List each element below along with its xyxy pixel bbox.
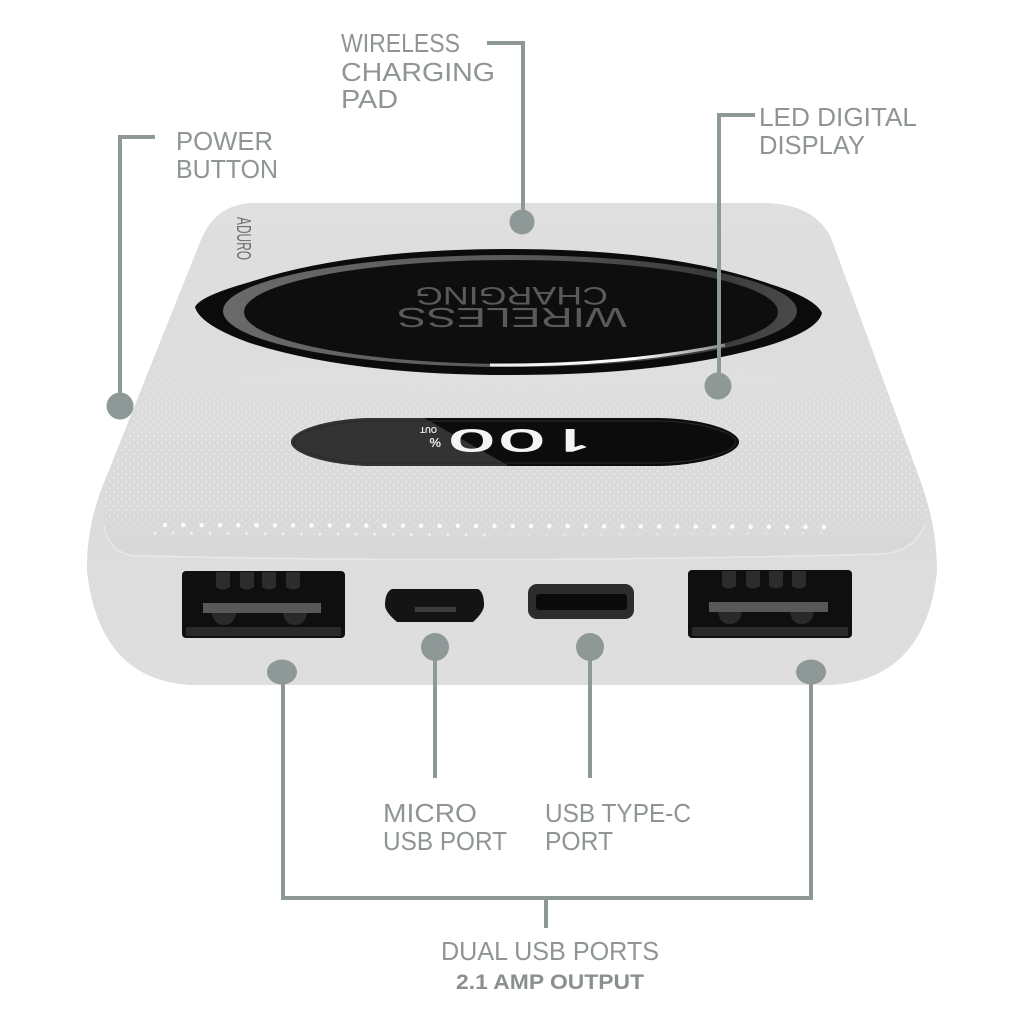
callout: LED digital display: DISPLAY [759, 130, 865, 160]
pad highlight [490, 345, 725, 365]
callout: USB type-C port [545, 633, 691, 856]
pad lettering: CHARGING [415, 281, 608, 309]
callout: wireless charging pad: CHARGING [341, 57, 495, 87]
power bank device [87, 203, 940, 685]
pad lettering [397, 281, 627, 333]
front edge dots [155, 525, 832, 535]
micro USB port [385, 589, 484, 622]
wireless charging pad [195, 249, 822, 375]
battery reading: % [429, 435, 441, 450]
callout: wireless charging pad: WIRELESS [341, 28, 460, 58]
callout: power button: POWER [176, 126, 273, 156]
dotted texture [102, 384, 926, 530]
callout: power button [106, 126, 278, 420]
callout: dual USB ports [267, 660, 826, 994]
USB type-C port [528, 584, 634, 619]
brand logo: ADURO [232, 217, 254, 260]
callout: dual USB ports: DUAL USB PORTS [441, 936, 659, 966]
device body [87, 203, 937, 685]
callout: wireless charging pad [341, 28, 534, 234]
callout: micro USB port: USB PORT [383, 826, 507, 856]
callout: micro USB port [383, 633, 507, 856]
pad lettering: WIRELESS [397, 302, 627, 333]
callout: wireless charging pad: PAD [341, 84, 398, 114]
callout: USB type-C port: PORT [545, 826, 613, 856]
battery reading [420, 424, 597, 453]
callout: dual USB ports: 2.1 AMP OUTPUT [456, 971, 644, 994]
front edge highlight [104, 525, 925, 560]
battery reading: OUT [420, 425, 437, 434]
right USB port [688, 570, 852, 638]
callout: USB type-C port: USB TYPE-C [545, 798, 691, 828]
top surface [102, 203, 927, 560]
battery reading: 100 [447, 424, 597, 453]
callout: micro USB port: MICRO [383, 798, 477, 828]
callout: LED digital display [704, 102, 917, 400]
callout: LED digital display: LED DIGITAL [759, 102, 917, 132]
callout: power button: BUTTON [176, 154, 278, 184]
left USB port [182, 571, 345, 638]
LED digital display [291, 418, 739, 466]
